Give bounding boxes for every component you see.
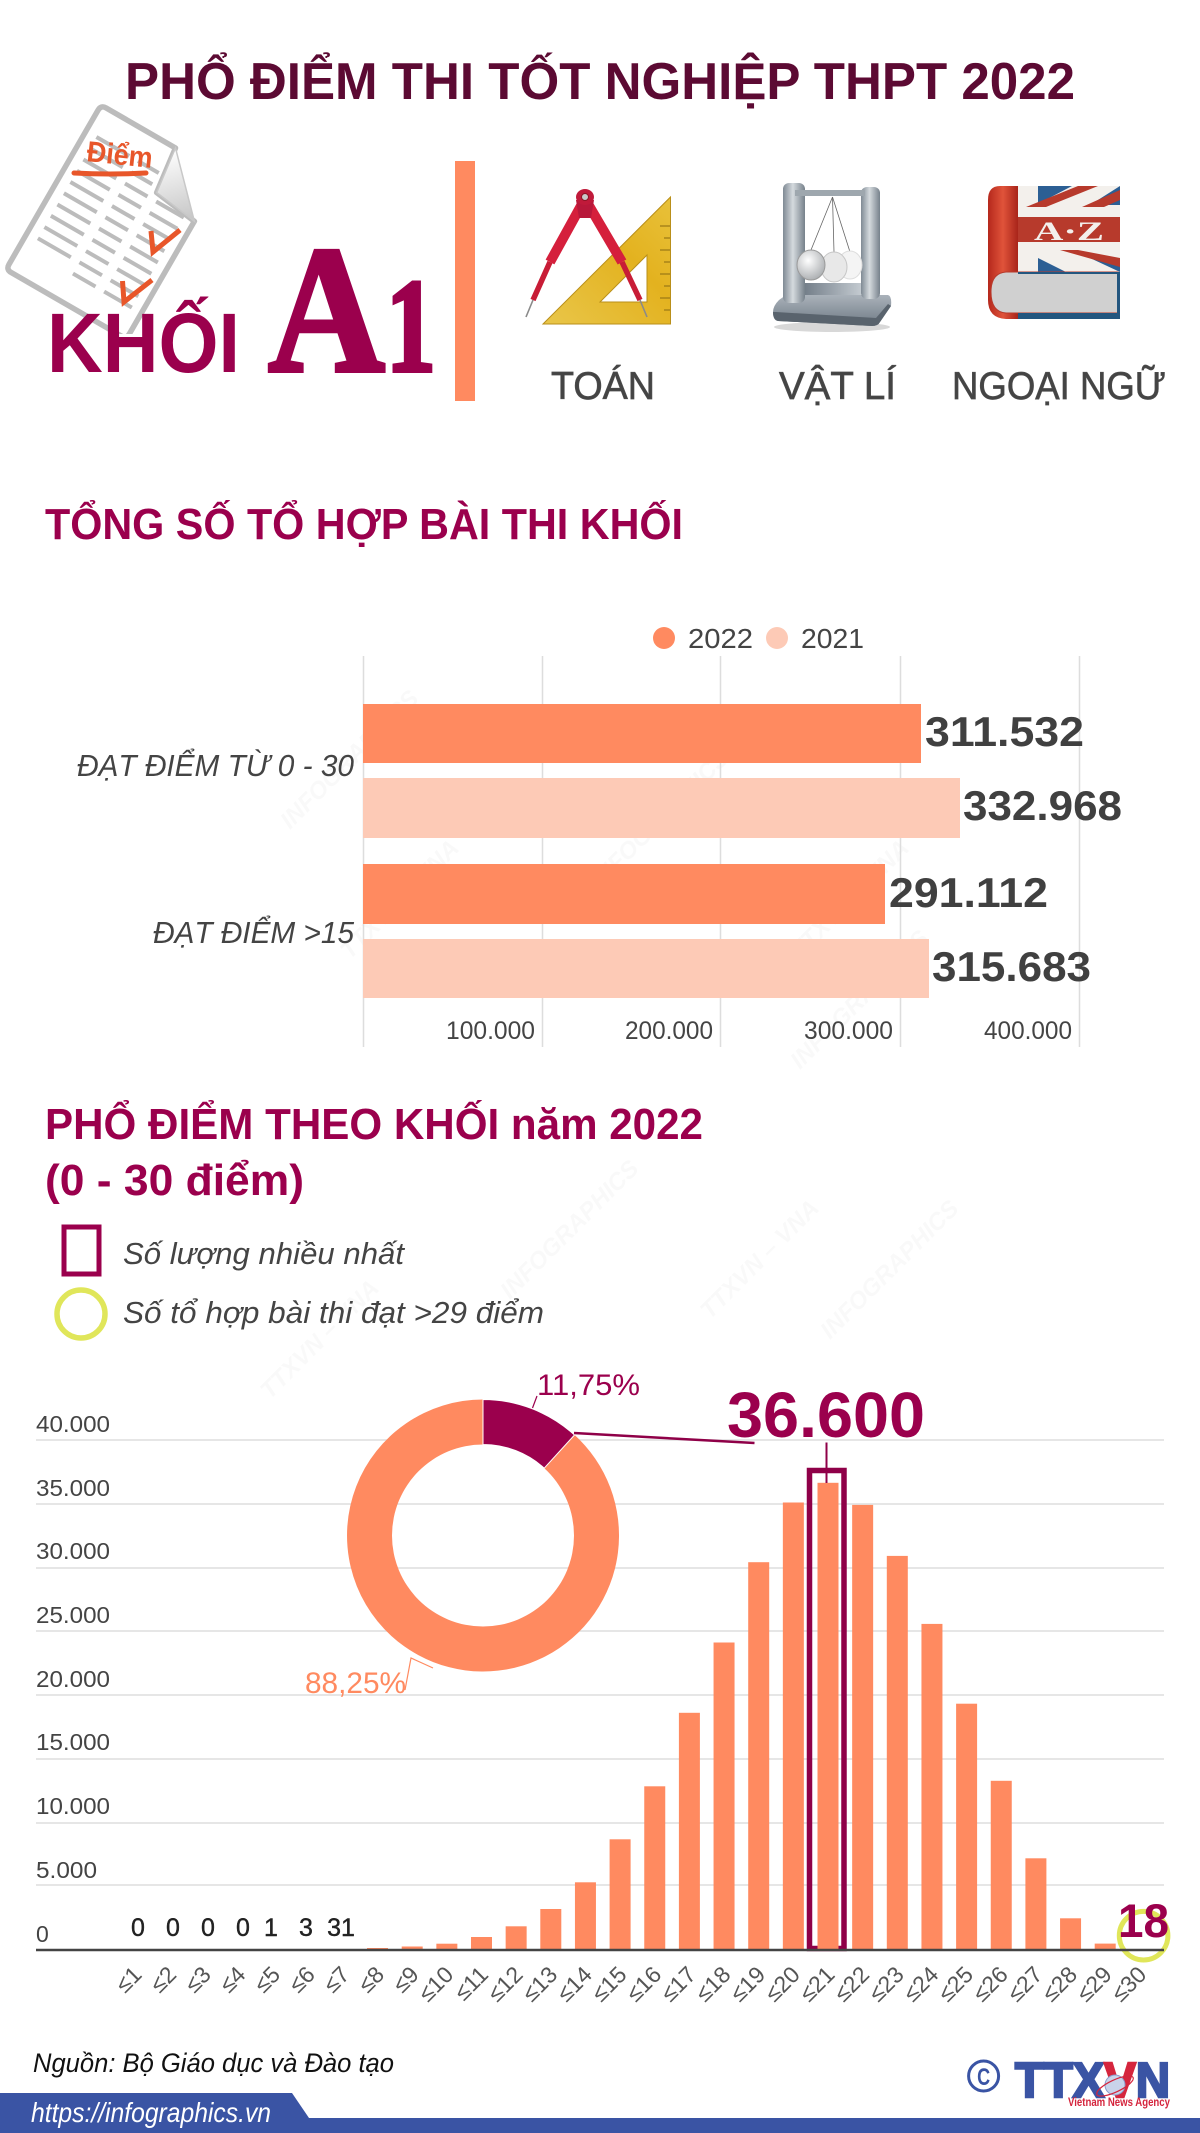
logo: TTXVN: Vietnam News Agency — [1068, 2095, 1170, 2109]
y axis labels: 10.000 — [36, 1793, 110, 1819]
icon: english book — [988, 186, 1120, 319]
small value labels — [131, 1914, 355, 1942]
orange divider — [455, 161, 475, 401]
watermarks: TTXVN – VNA — [335, 835, 465, 964]
heading: block name: A — [268, 210, 385, 411]
heading: distribution: PHỔ ĐIỂM THEO KHỐI năm 2022 — [45, 1098, 703, 1149]
x axis labels: ≤5 — [249, 1961, 285, 1998]
bar chart: totals: ĐẠT ĐIỂM TỪ 0 - 30 — [77, 748, 354, 783]
value: top score count: 18 — [1118, 1894, 1169, 1947]
bar chart: totals: ĐẠT ĐIỂM >15 — [153, 915, 355, 950]
y axis labels: 35.000 — [36, 1475, 110, 1501]
bars — [367, 1483, 1116, 1950]
small value labels: 3 — [299, 1914, 313, 1942]
y axis labels: 25.000 — [36, 1602, 110, 1628]
callout: peak value: 36.600 — [727, 1379, 925, 1451]
x axis labels: ≤13 — [517, 1961, 562, 2007]
bar chart: totals: 300.000 — [804, 1017, 893, 1045]
callout: peak value — [574, 1379, 925, 1483]
watermarks: TTXVN – VNA — [695, 1195, 825, 1324]
x axis labels: ≤30 — [1106, 1961, 1151, 2007]
x axis labels: ≤12 — [482, 1961, 528, 2007]
peak highlight box — [810, 1470, 844, 1948]
x axis labels: ≤1 — [110, 1961, 147, 1998]
x axis labels: ≤25 — [933, 1961, 978, 2007]
y axis labels — [36, 1411, 110, 1947]
x axis labels: ≤24 — [898, 1961, 944, 2007]
heading: block name: 1 — [386, 252, 436, 400]
x axis labels: ≤9 — [387, 1961, 424, 1998]
x axis labels: ≤29 — [1071, 1961, 1117, 2007]
circle highlight — [1119, 1911, 1168, 1960]
watermarks: INFOGRAPHICS — [495, 1155, 644, 1304]
watermarks: INFOGRAPHICS — [785, 925, 934, 1074]
y axis labels: 0 — [36, 1921, 49, 1947]
x axis labels: ≤8 — [353, 1961, 389, 1998]
heading: distribution: (0 - 30 điểm) — [45, 1156, 304, 1205]
legend: 2022 — [688, 623, 753, 654]
bar chart: totals: 332.968 — [963, 782, 1122, 829]
source: Nguồn: Bộ Giáo dục và Đào tạo — [33, 2048, 394, 2078]
x axis labels: ≤20 — [759, 1961, 805, 2007]
subject labels: NGOẠI NGỮ — [952, 364, 1166, 408]
share label 88,25%: 88,25% — [305, 1667, 406, 1700]
icon: english book: A·Z — [1034, 217, 1104, 246]
title: PHỔ ĐIỂM THI TỐT NGHIỆP THPT 2022 — [125, 52, 1075, 111]
icon: compass and set square — [526, 189, 670, 324]
x axis labels: ≤6 — [283, 1961, 320, 1998]
bar chart: totals — [77, 623, 1122, 1047]
y axis labels: 40.000 — [36, 1411, 110, 1437]
white backing behind block name — [40, 334, 240, 384]
subject labels: VẬT LÍ — [779, 365, 896, 408]
share label 11,75%: 11,75% — [537, 1369, 640, 1402]
footer bar: https://infographics.vn — [31, 2097, 271, 2128]
x axis labels: ≤14 — [552, 1961, 597, 2007]
icon: score sheet: Điểm — [85, 136, 154, 175]
x axis labels: ≤3 — [179, 1961, 216, 1998]
y axis labels: 15.000 — [36, 1729, 110, 1755]
bar chart: totals: 200.000 — [625, 1017, 713, 1045]
subject labels — [551, 364, 1166, 408]
small value labels: 0 — [201, 1914, 215, 1942]
watermarks — [255, 685, 964, 1404]
x axis labels: ≤21 — [794, 1961, 840, 2007]
x axis labels: ≤2 — [145, 1961, 181, 1998]
icon: newton cradle — [773, 183, 891, 332]
small value labels: 0 — [166, 1914, 180, 1942]
x axis labels: ≤17 — [656, 1961, 701, 2007]
x axis labels: ≤4 — [214, 1961, 251, 1998]
x axis labels: ≤22 — [829, 1961, 874, 2007]
icon: score sheet — [6, 105, 221, 339]
heading: block name — [47, 210, 436, 411]
x axis labels: ≤26 — [967, 1961, 1013, 2007]
legend — [653, 623, 864, 654]
watermarks: TTXVN – VNA — [255, 1275, 385, 1404]
x axis labels: ≤11 — [449, 1961, 493, 2005]
bar chart: totals: 311.532 — [925, 708, 1084, 755]
legend: highlights — [57, 1227, 544, 1338]
legend: highlights: Số lượng nhiều nhất — [123, 1236, 405, 1271]
heading: block name: KHỐI — [47, 296, 240, 390]
small value labels: 31 — [327, 1914, 355, 1942]
heading: total: TỔNG SỐ TỔ HỢP BÀI THI KHỐI — [45, 498, 683, 549]
watermarks: TTXVN – VNA — [785, 835, 915, 964]
logo: TTXVN: C — [977, 2064, 990, 2091]
donut chart — [305, 1369, 640, 1700]
legend: highlights: Số tổ hợp bài thi đạt >29 điểm — [123, 1295, 544, 1330]
x axis labels — [110, 1961, 1151, 2007]
x axis labels: ≤15 — [586, 1961, 632, 2007]
small value labels: 0 — [236, 1914, 250, 1942]
bar chart: totals: 315.683 — [932, 943, 1091, 990]
x axis labels: ≤7 — [318, 1961, 354, 1998]
watermarks: INFOGRAPHICS — [275, 685, 424, 834]
small value labels: 1 — [264, 1914, 278, 1942]
x axis labels: ≤27 — [1002, 1961, 1047, 2007]
y axis labels: 20.000 — [36, 1666, 110, 1692]
legend: 2021 — [801, 623, 864, 654]
watermarks: INFOGRAPHICS — [815, 1195, 964, 1344]
subject labels: TOÁN — [551, 365, 655, 408]
watermarks: INFOGRAPHICS — [585, 745, 734, 894]
x axis labels: ≤16 — [621, 1961, 666, 2007]
y axis labels: 30.000 — [36, 1538, 110, 1564]
bar chart: totals: 400.000 — [984, 1017, 1072, 1045]
x axis labels: ≤23 — [863, 1961, 909, 2007]
y axis labels: 5.000 — [36, 1857, 97, 1883]
x axis labels: ≤10 — [413, 1961, 458, 2007]
x axis labels: ≤28 — [1037, 1961, 1082, 2007]
column chart: score distribution — [36, 1411, 1169, 2007]
footer bar — [0, 2093, 1200, 2133]
x axis labels: ≤18 — [690, 1961, 736, 2007]
heading: distribution — [45, 1098, 703, 1205]
share label 88,25% — [305, 1658, 433, 1700]
bar chart: totals: 291.112 — [889, 869, 1048, 916]
bar chart: totals: 100.000 — [446, 1017, 535, 1045]
x axis labels: ≤19 — [725, 1961, 770, 2007]
small value labels: 0 — [131, 1914, 145, 1942]
logo: TTXVN: TTXVN — [1015, 2054, 1170, 2108]
